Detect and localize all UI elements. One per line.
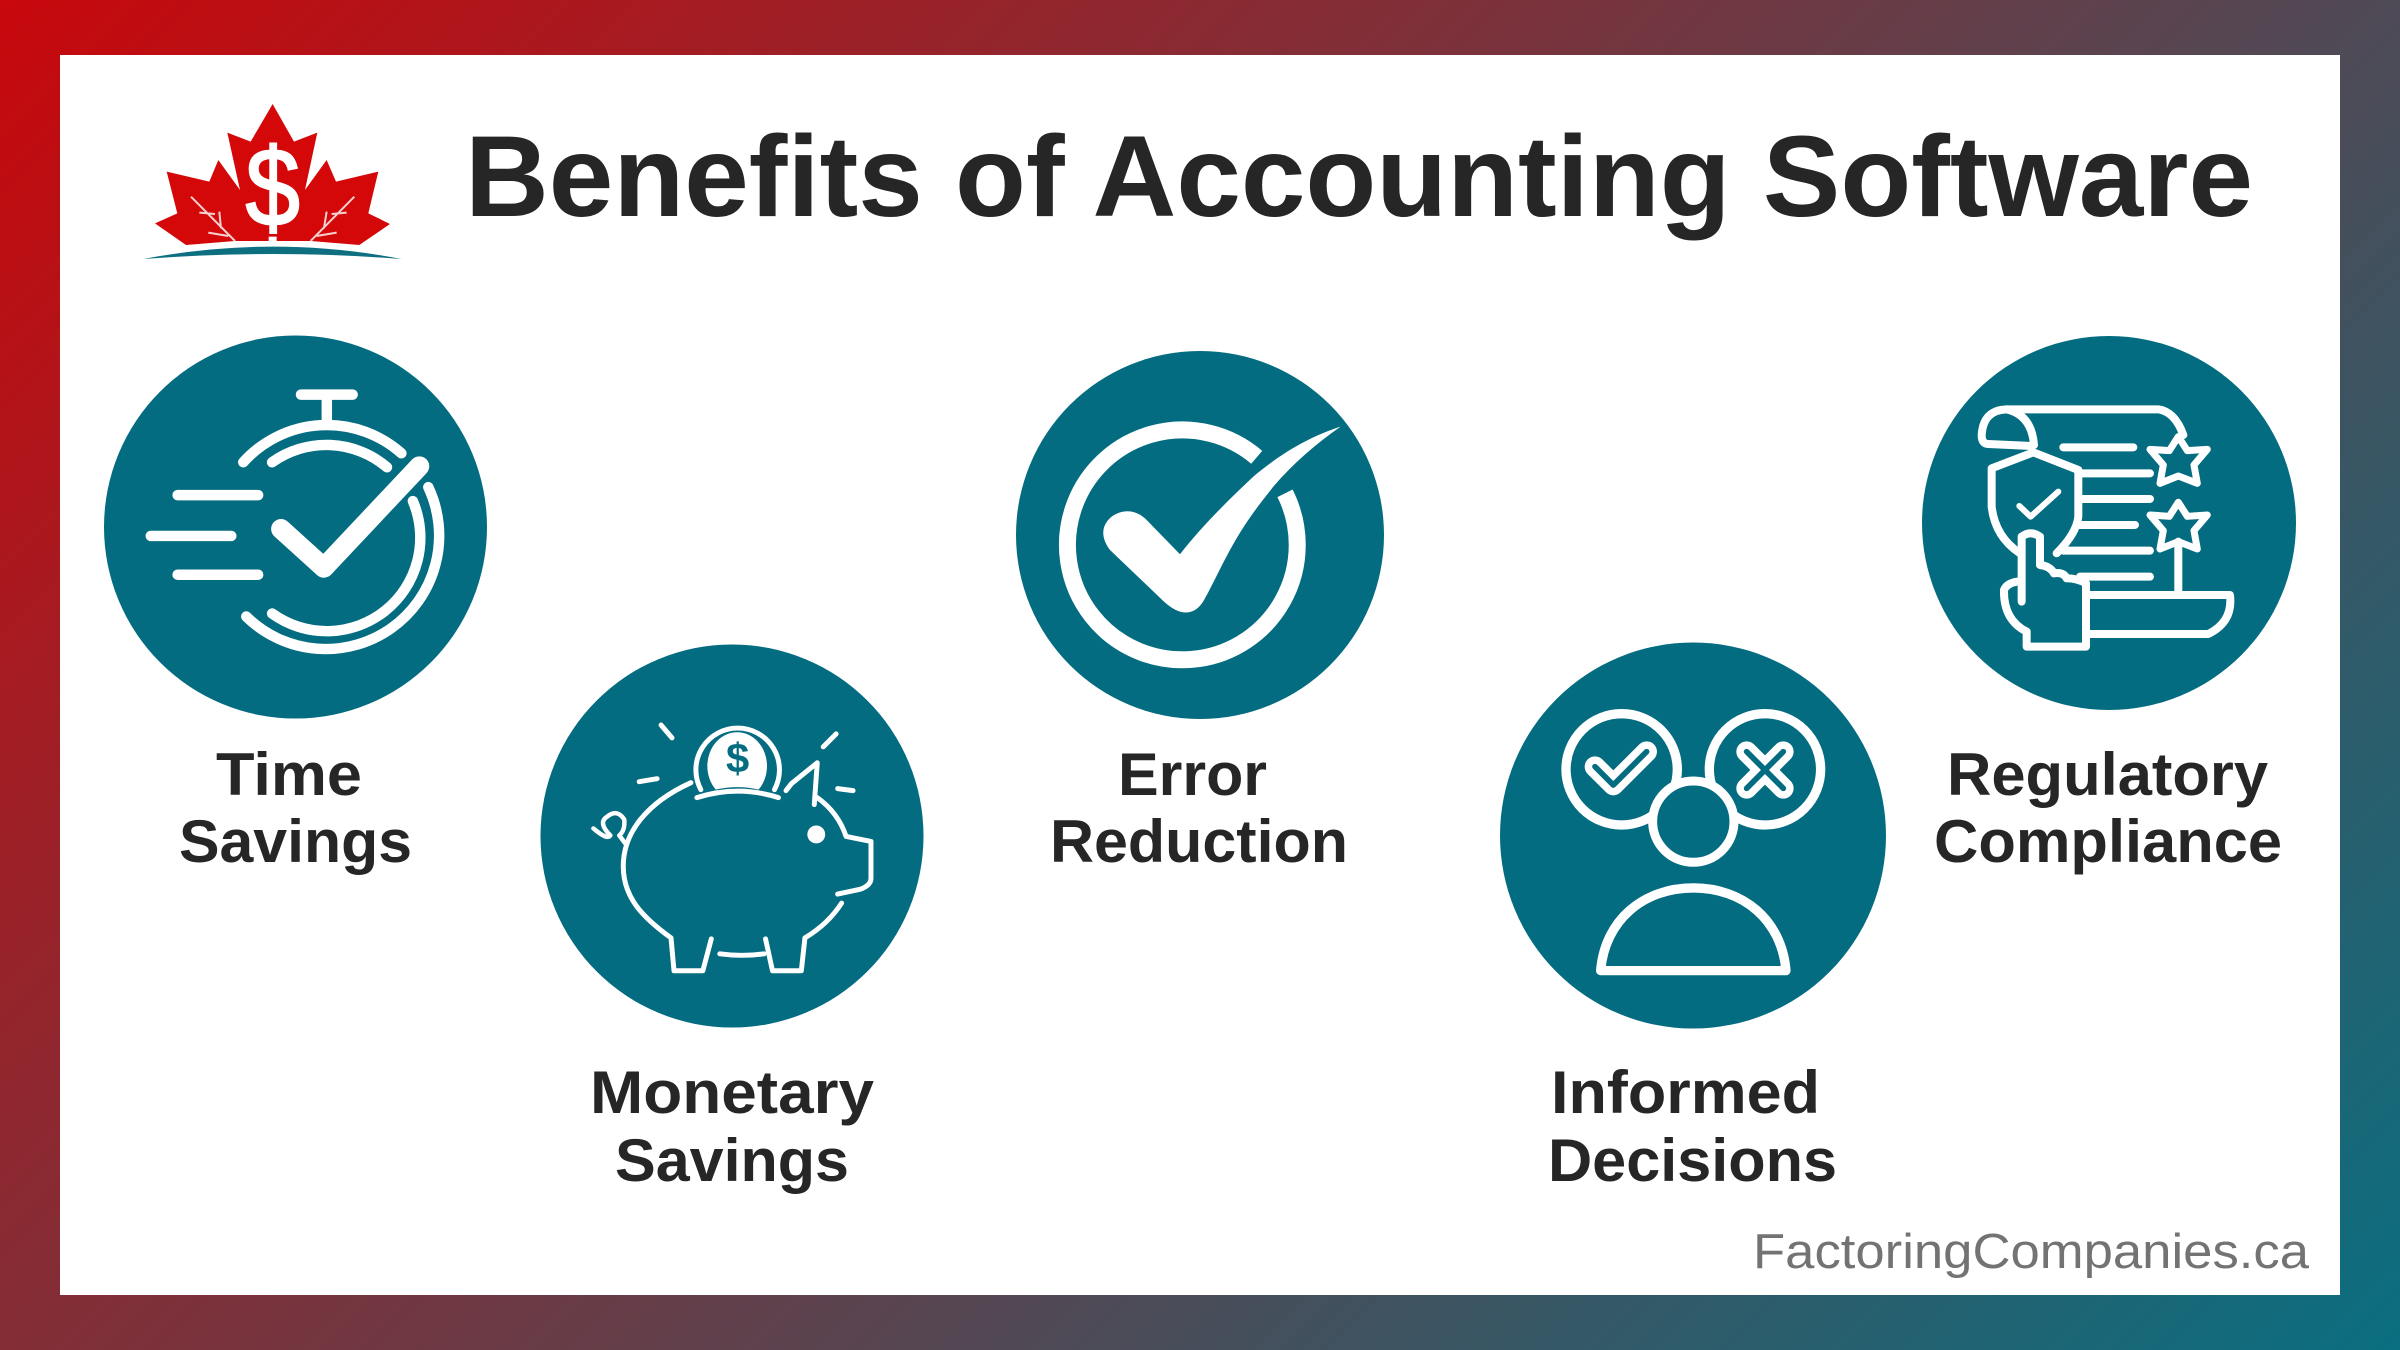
label: informed decisions: Decisions xyxy=(1548,1127,1837,1194)
icon circle: person weighing check and cross xyxy=(1500,642,1886,1028)
icon circle: check in ring xyxy=(1016,351,1384,719)
title: Benefits of Accounting Software xyxy=(465,113,2253,241)
label: monetary savings xyxy=(590,1059,875,1194)
label: error reduction: Error xyxy=(1118,741,1267,808)
label: error reduction: Reduction xyxy=(1050,808,1348,875)
label: time savings: Savings xyxy=(179,808,412,875)
benefit: informed decisions xyxy=(1500,642,1886,1194)
icon circle: stopwatch with check xyxy=(104,336,487,718)
logo: maple leaf with dollar sign xyxy=(143,104,402,259)
benefit: regulatory compliance xyxy=(1922,336,2296,875)
footer: website credit: FactoringCompanies.ca xyxy=(1753,1224,2309,1279)
label: informed decisions xyxy=(1548,1059,1837,1194)
label: regulatory compliance: Compliance xyxy=(1934,808,2282,875)
label: monetary savings: Monetary xyxy=(590,1059,875,1126)
label: time savings xyxy=(179,741,412,875)
icon circle: piggy bank xyxy=(540,644,924,1028)
icon circle: piggy bank: $ xyxy=(726,735,749,782)
benefit: error reduction xyxy=(1016,351,1384,875)
logo: maple leaf with dollar sign: $ xyxy=(245,126,300,250)
label: error reduction xyxy=(1050,741,1348,875)
label: regulatory compliance xyxy=(1934,741,2282,875)
label: informed decisions: Informed xyxy=(1551,1059,1820,1126)
label: regulatory compliance: Regulatory xyxy=(1947,741,2269,808)
benefit: time savings xyxy=(104,336,487,875)
benefit: monetary savings xyxy=(540,644,924,1194)
label: monetary savings: Savings xyxy=(615,1127,849,1194)
label: time savings: Time xyxy=(216,741,362,808)
icon circle: document, shield and stars xyxy=(1922,336,2296,710)
